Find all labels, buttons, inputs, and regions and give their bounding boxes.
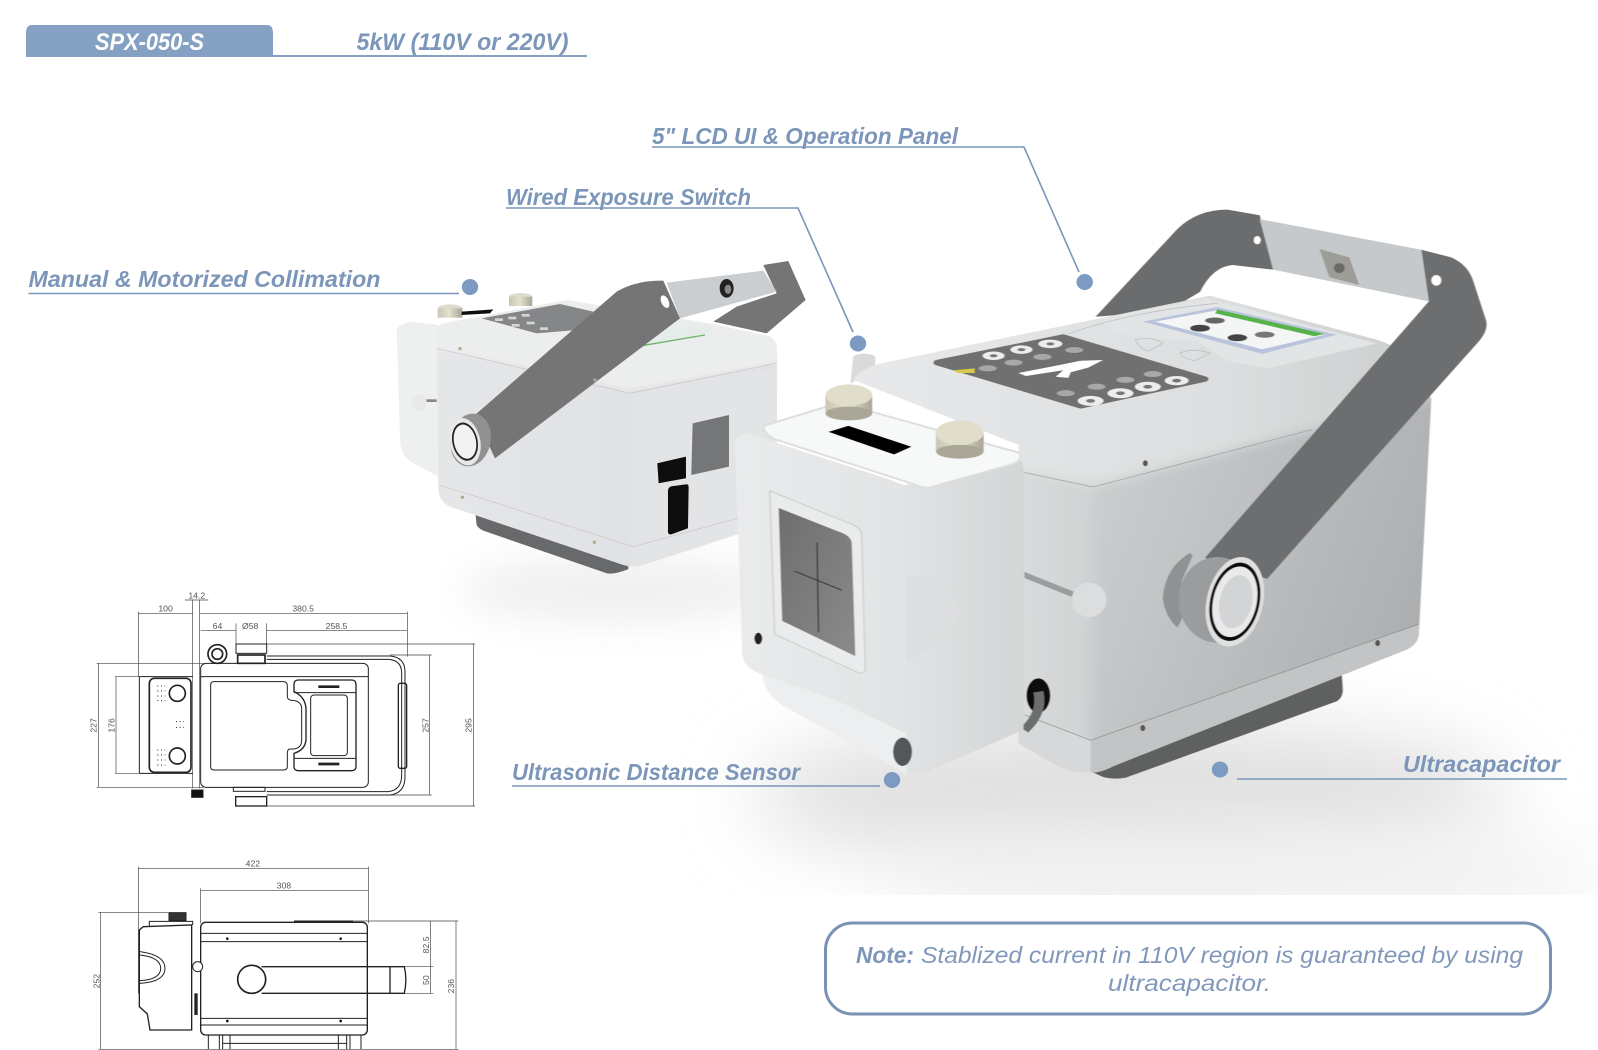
dimension values: 236 xyxy=(446,979,456,993)
callout: Manual and Motorized Collimation: Manual & Motorized Collimation xyxy=(28,266,380,292)
dimension values: 422 xyxy=(246,859,260,869)
dimension values xyxy=(91,859,456,993)
right handle arm xyxy=(1205,250,1487,579)
floor shadow: rear device xyxy=(483,560,740,621)
top view panel xyxy=(211,682,302,770)
callout: LCD UI and Operation Panel: 5" LCD UI & Operation Panel xyxy=(652,123,959,149)
dimension values: 14.2 xyxy=(188,590,205,600)
body shell xyxy=(854,296,1432,772)
callout: Ultrasonic Distance Sensor xyxy=(512,759,900,788)
rear screws xyxy=(458,347,597,544)
top view screen xyxy=(294,680,356,771)
dimension values: 227 xyxy=(89,718,99,733)
callout: Ultracapacitor: Ultracapacitor xyxy=(1403,751,1561,777)
note box: Stablized current in 110V region is guaranteed by using xyxy=(921,942,1523,968)
grip plate xyxy=(1319,249,1359,285)
rear rod knob xyxy=(412,394,437,411)
screen recess xyxy=(1098,299,1377,368)
exposure switch post xyxy=(850,354,875,384)
dimension values: 176 xyxy=(107,718,117,733)
rod and knob xyxy=(1024,572,1107,617)
top view collimator xyxy=(139,677,193,773)
dimension lines xyxy=(98,867,458,1049)
dimension values: 258.5 xyxy=(326,621,348,631)
display slot xyxy=(828,426,912,454)
rear handle xyxy=(475,261,806,458)
side view screws xyxy=(226,937,342,1022)
side view handle xyxy=(262,967,406,993)
dimension lines xyxy=(97,600,475,806)
dimension values: 252 xyxy=(91,974,101,988)
main device photo xyxy=(737,210,1488,779)
collimator top plate xyxy=(764,403,1021,488)
header bar: model name xyxy=(26,25,273,57)
callout: Ultrasonic Distance Sensor: Ultrasonic Distance Sensor xyxy=(512,759,801,785)
rear device photo xyxy=(397,261,813,600)
side hub xyxy=(1163,553,1271,650)
note box xyxy=(826,923,1550,1014)
rear power socket xyxy=(668,484,689,534)
side view collimator xyxy=(139,925,192,1030)
header bar: model name: SPX-050-S xyxy=(95,29,204,56)
callout: Ultracapacitor xyxy=(1212,751,1567,779)
collimator window xyxy=(770,491,865,673)
side view base xyxy=(208,1035,361,1049)
rear body xyxy=(437,300,777,566)
top view dimension drawing xyxy=(89,590,475,806)
collimator knobs xyxy=(825,384,984,459)
dimension values: 380.5 xyxy=(292,604,314,614)
rear keypad and screen xyxy=(482,304,715,347)
ultrasonic sensor xyxy=(893,738,912,766)
note box: Note: xyxy=(856,942,914,968)
rear port xyxy=(657,457,686,483)
keypad xyxy=(937,337,1205,406)
dimension values: Ø58 xyxy=(242,621,259,631)
dimension values: 295 xyxy=(464,718,474,733)
rear speaker panel xyxy=(691,415,729,475)
cable port xyxy=(1024,678,1050,730)
collimator shell xyxy=(737,443,1024,773)
dimension values: 82.5 xyxy=(421,936,431,953)
top view body xyxy=(201,663,368,787)
side view dimension drawing xyxy=(91,859,458,1049)
side view body xyxy=(201,922,367,1035)
dimension values xyxy=(89,590,474,733)
base xyxy=(1088,674,1343,779)
callout: LCD UI and Operation Panel xyxy=(652,123,1093,290)
dimension values: 308 xyxy=(277,881,291,891)
screen xyxy=(1143,307,1337,354)
header power spec: 5kW (110V or 220V) xyxy=(356,29,569,56)
dimension values: 64 xyxy=(213,621,222,631)
callout: Wired Exposure Switch: Wired Exposure Switch xyxy=(506,184,751,210)
top panel outlines xyxy=(1068,303,1217,361)
left arm of handle xyxy=(1096,210,1273,317)
dimension values: 50 xyxy=(421,975,431,985)
indicator hole xyxy=(754,633,762,644)
rear base xyxy=(475,510,628,574)
dimension values: 257 xyxy=(420,718,430,733)
rear collimator xyxy=(397,322,438,477)
callout: Manual and Motorized Collimation xyxy=(28,266,478,295)
rear hub xyxy=(445,410,496,470)
floor shadow: main device xyxy=(752,707,1545,895)
dimension values: 100 xyxy=(158,604,173,614)
handle grip xyxy=(1260,219,1429,301)
top view handle xyxy=(267,656,405,795)
screws xyxy=(1011,460,1380,731)
note box: ultracapacitor. xyxy=(1108,970,1271,996)
callout: Wired Exposure Switch xyxy=(506,184,866,352)
top view knobs xyxy=(208,645,227,663)
rear knobs xyxy=(438,293,532,318)
